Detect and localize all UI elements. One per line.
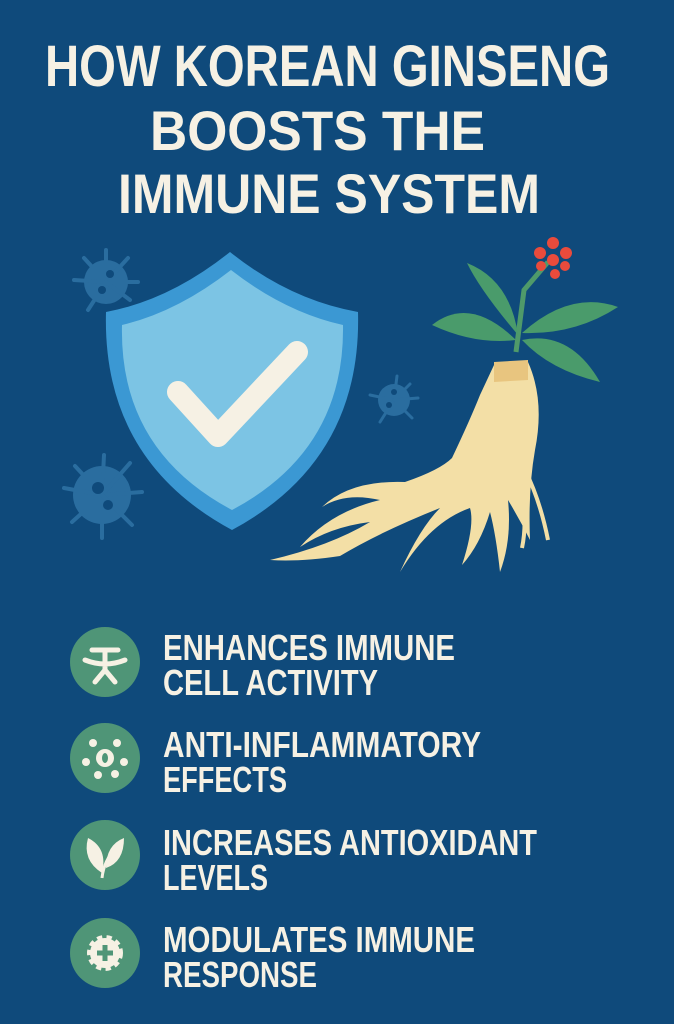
list item 3 bbox=[70, 820, 537, 898]
icon: virus bottom left bbox=[64, 455, 142, 538]
icon: virus small bbox=[370, 376, 418, 422]
icon: immune cell figure bbox=[70, 627, 140, 697]
list item 2: EFFECTS bbox=[163, 759, 287, 800]
list item 2 bbox=[70, 723, 481, 800]
list item 4: RESPONSE bbox=[163, 954, 317, 995]
list item 3: INCREASES ANTIOXIDANT bbox=[163, 822, 537, 863]
title: IMMUNE SYSTEM bbox=[118, 162, 540, 225]
list item 4: MODULATES IMMUNE bbox=[163, 919, 475, 960]
icon: anti-inflammatory cell bbox=[70, 723, 140, 793]
icon: gear with plus bbox=[70, 918, 140, 988]
list item 4 bbox=[70, 918, 475, 995]
list item 3: LEVELS bbox=[163, 857, 268, 898]
icon: virus top left bbox=[74, 250, 138, 310]
list item 2: ANTI-INFLAMMATORY bbox=[163, 724, 481, 765]
list item 1 bbox=[70, 627, 455, 703]
icon: leaves bbox=[70, 820, 140, 890]
list item 1: ENHANCES IMMUNE bbox=[163, 627, 455, 668]
title bbox=[45, 34, 610, 225]
icon: ginseng root with leaves and berries bbox=[270, 237, 618, 572]
list item 1: CELL ACTIVITY bbox=[163, 662, 378, 703]
title: BOOSTS THE bbox=[150, 99, 485, 162]
icon: shield with check bbox=[106, 252, 358, 530]
